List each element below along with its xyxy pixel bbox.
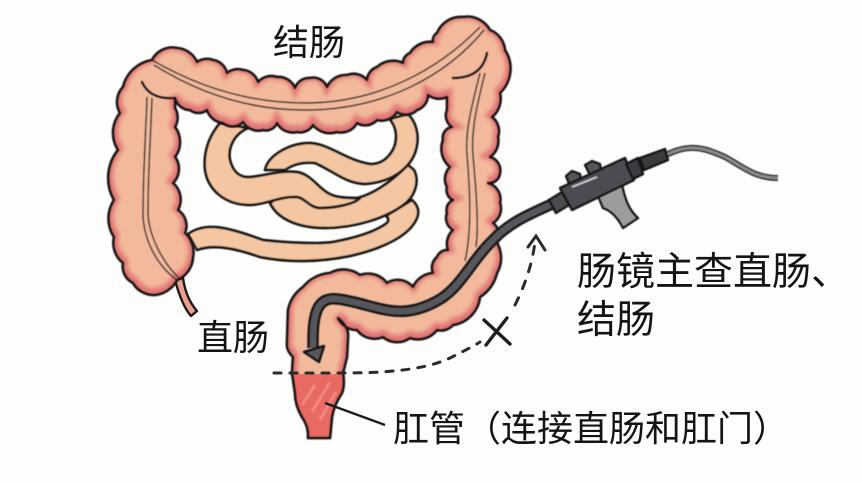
transverse colon band lines xyxy=(152,27,484,110)
label: colonoscope note: 肠镜主查直肠、 xyxy=(577,251,850,294)
ascending colon band lines xyxy=(143,97,179,280)
body xyxy=(560,158,634,210)
colonoscope handle xyxy=(549,148,778,228)
arrowhead xyxy=(528,236,545,250)
grip xyxy=(598,184,638,228)
dashed route arrow with cross xyxy=(274,236,545,373)
descending colon band lines xyxy=(465,73,485,261)
flexure creases xyxy=(142,53,487,98)
connector xyxy=(640,149,668,170)
label: colon: 结肠 xyxy=(273,22,345,63)
label: anal canal: 肛管（连接直肠和肛门） xyxy=(393,408,789,449)
neck xyxy=(626,158,643,179)
cross mark xyxy=(484,318,510,345)
label: rectum: 直肠 xyxy=(197,317,269,358)
appendix xyxy=(175,278,197,316)
label: colonoscope note: 结肠 xyxy=(577,299,655,342)
colonoscope tube xyxy=(304,204,552,362)
loop: lower central xyxy=(270,165,417,228)
collar xyxy=(549,192,569,213)
label: colonoscope note xyxy=(577,251,850,342)
anal canal: red shaded section xyxy=(293,374,343,437)
leader line to anal canal xyxy=(325,403,385,425)
small intestine xyxy=(188,114,418,261)
illustration: colon anatomy and colonoscope xyxy=(106,14,824,445)
tube tip arrowhead xyxy=(304,346,324,362)
loop: long bottom tube from cecum xyxy=(188,200,418,261)
buttons xyxy=(566,171,581,186)
cable xyxy=(666,148,778,178)
loop: upper central xyxy=(265,114,418,184)
colon xyxy=(108,15,510,440)
loop: left curl xyxy=(205,123,360,208)
